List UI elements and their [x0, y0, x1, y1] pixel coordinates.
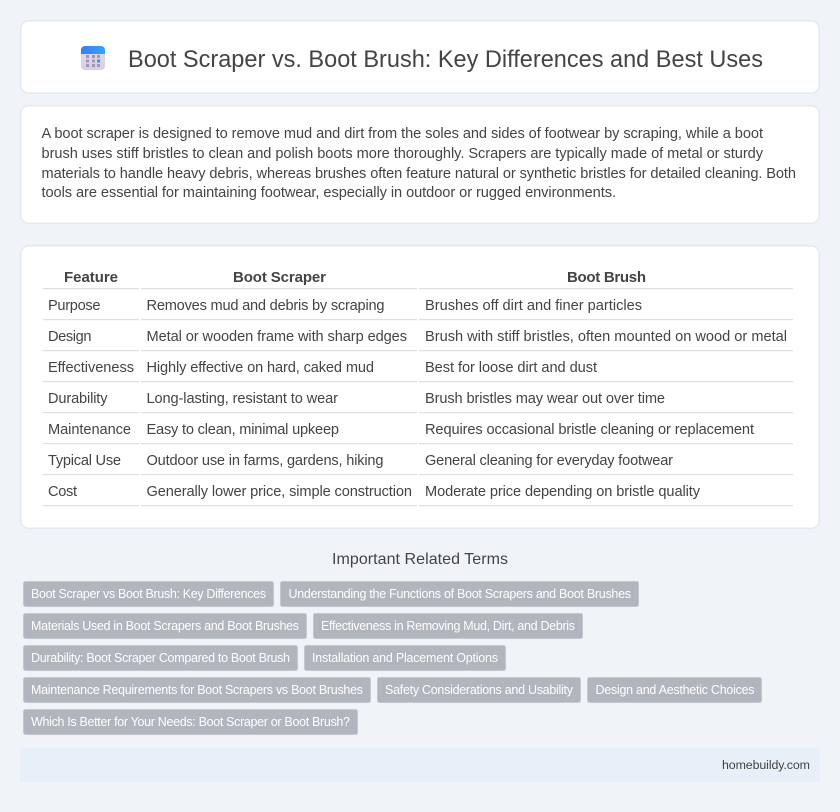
- row: purpose: Brushes off dirt and finer particles: [425, 298, 642, 314]
- tag: Materials Used in Boot Scrapers and Boot Brushes: [31, 619, 299, 633]
- intro paragraph: tools are essential for maintaining footwear, especially in outdoor or rugged environments.: [42, 185, 616, 201]
- icon: calendar: [81, 46, 105, 70]
- row: maintenance: Easy to clean, minimal upkeep: [146, 422, 339, 438]
- row: design: Metal or wooden frame with sharp edges: [146, 329, 407, 345]
- row: durability: [43, 391, 793, 413]
- table header: [43, 269, 793, 289]
- row: cost: Generally lower price, simple construction: [146, 484, 412, 500]
- row: design: Brush with stiff bristles, often mounted on wood or metal: [425, 329, 787, 345]
- row: effectiveness: Highly effective on hard, caked mud: [146, 360, 374, 376]
- row: cost: Cost: [48, 484, 77, 500]
- row: typical use: Outdoor use in farms, gardens, hiking: [146, 453, 384, 469]
- row: typical use: General cleaning for everyday footwear: [425, 453, 673, 469]
- tag: [378, 678, 580, 702]
- tag: [24, 646, 298, 670]
- tag: Maintenance Requirements for Boot Scrapers vs Boot Brushes: [31, 683, 363, 697]
- row: effectiveness: [43, 360, 793, 382]
- tag: Design and Aesthetic Choices: [596, 683, 754, 697]
- tag: [24, 582, 274, 606]
- tag: Installation and Placement Options: [312, 651, 498, 665]
- footer bar: [20, 748, 820, 782]
- row: cost: [43, 484, 793, 506]
- row: design: [43, 329, 793, 351]
- table header: Boot Brush: [567, 269, 646, 286]
- row: durability: Long-lasting, resistant to wear: [146, 391, 338, 407]
- row: maintenance: [43, 422, 793, 444]
- footer site name: homebuildy.com: [722, 758, 810, 772]
- tag: [314, 614, 582, 638]
- row: effectiveness: Effectiveness: [48, 360, 134, 376]
- tag: Which Is Better for Your Needs: Boot Scraper or Boot Brush?: [31, 715, 350, 729]
- row: purpose: [43, 298, 793, 320]
- tag: Boot Scraper vs Boot Brush: Key Differences: [31, 587, 266, 601]
- panel: intro text: [21, 106, 819, 223]
- row: typical use: [43, 453, 793, 475]
- related term tags: [24, 582, 762, 734]
- tag: Effectiveness in Removing Mud, Dirt, and Debris: [321, 619, 575, 633]
- table header: Boot Scraper: [233, 269, 326, 286]
- row: design: Design: [48, 329, 92, 345]
- row: durability: Durability: [48, 391, 108, 407]
- tag: Understanding the Functions of Boot Scrapers and Boot Brushes: [288, 587, 631, 601]
- row: durability: Brush bristles may wear out over time: [425, 391, 665, 407]
- tag: Safety Considerations and Usability: [385, 683, 574, 697]
- tag: [588, 678, 762, 702]
- table header: Feature: [64, 269, 118, 286]
- row: typical use: Typical Use: [48, 453, 121, 469]
- tag: [24, 678, 370, 702]
- title: Boot Scraper vs. Boot Brush: Key Differences and Best Uses: [128, 46, 763, 73]
- row: effectiveness: Best for loose dirt and dust: [425, 360, 597, 376]
- intro paragraph: A boot scraper is designed to remove mud and dirt from the soles and sides of footwear by scraping, while a boot: [42, 126, 763, 142]
- panel: comparison table: [21, 246, 819, 528]
- row: maintenance: Requires occasional bristle cleaning or replacement: [425, 422, 754, 438]
- intro paragraph: materials to handle heavy debris, whereas brushes often feature natural or synthetic bristles for detailed cleaning. Both: [42, 166, 796, 182]
- row: purpose: Purpose: [48, 298, 100, 314]
- intro paragraph: [42, 126, 796, 201]
- row: cost: Moderate price depending on bristle quality: [425, 484, 701, 500]
- row: purpose: Removes mud and debris by scraping: [146, 298, 384, 314]
- heading: related terms: Important Related Terms: [332, 551, 508, 568]
- intro paragraph: brush uses stiff bristles to clean and polish boots more thoroughly. Scrapers are typically made of metal or sturdy: [42, 146, 764, 162]
- tag: [304, 646, 506, 670]
- row: maintenance: Maintenance: [48, 422, 131, 438]
- tag: [24, 710, 358, 734]
- panel: header: [21, 21, 819, 93]
- tag: [24, 614, 306, 638]
- tag: [280, 582, 638, 606]
- tag: Durability: Boot Scraper Compared to Boot Brush: [31, 651, 290, 665]
